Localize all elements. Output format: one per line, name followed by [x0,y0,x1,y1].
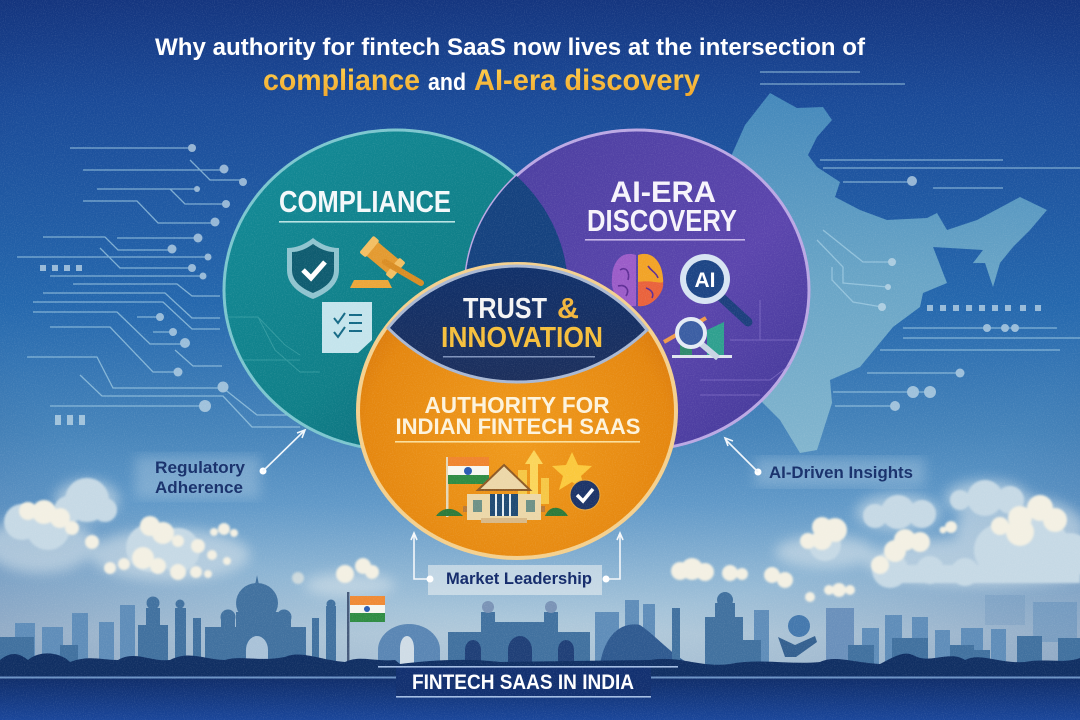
overlap: trust and innovation: INNOVATION [441,322,603,354]
icon: check badge [570,480,600,510]
flag on skyline [350,596,385,622]
callout: regulatory adherence: Adherence [155,478,243,497]
AI-era discovery heading [585,176,745,241]
icon: AI magnifier [680,254,748,322]
dark tree line [0,653,1080,677]
venn circle: authority for Indian fintech SaaS [358,264,676,558]
callout: market leadership [411,533,623,595]
overlap: trust and innovation: & [557,293,579,325]
overlap: trust and innovation [388,266,647,382]
title [155,34,866,97]
title: AI-era discovery [474,64,700,97]
icon: gavel [350,236,421,288]
title: Why authority for fintech SaaS now lives at the intersection of [155,34,866,61]
background: circuit lines [17,72,1080,427]
callout: AI-driven insights: AI-Driven Insights [769,463,913,482]
callout: regulatory adherence: Regulatory [155,458,246,477]
callout: regulatory adherence [135,430,305,498]
title: and [428,69,466,96]
icon: checklist document [322,302,372,353]
background: clouds [0,478,1080,602]
compliance heading: COMPLIANCE [279,184,451,219]
AI-era discovery heading: DISCOVERY [587,203,737,238]
ground band and water [0,676,1080,720]
icon: brain [612,254,663,306]
icon: India flag [446,457,489,517]
AI-era discovery heading: AI-ERA [610,176,716,209]
icon: growth arrow and bars [518,450,549,504]
overlap: compliance and discovery [466,176,566,270]
title: compliance [263,64,420,97]
skyline: Indian city silhouette [0,575,1080,677]
icon: institution building [436,465,568,523]
icon: star [552,452,592,490]
footer banner: Fintech SaaS in India [378,666,678,698]
icon: chart magnifier [664,318,732,358]
callout: AI-driven insights [725,438,925,486]
authority heading: AUTHORITY FOR [424,392,610,418]
venn circle: AI-era discovery [464,128,810,448]
background: India map [720,93,1047,453]
overlap: trust and innovation: TRUST [463,293,547,325]
icon: shield with check [287,238,339,299]
venn circle: compliance [222,128,516,448]
footer banner: Fintech SaaS in India: FINTECH SAAS IN INDIA [412,671,634,694]
authority heading: INDIAN FINTECH SAAS [396,414,640,439]
authority heading [395,392,640,443]
callout: market leadership: Market Leadership [446,569,592,588]
icon: AI magnifier: AI [694,269,716,292]
